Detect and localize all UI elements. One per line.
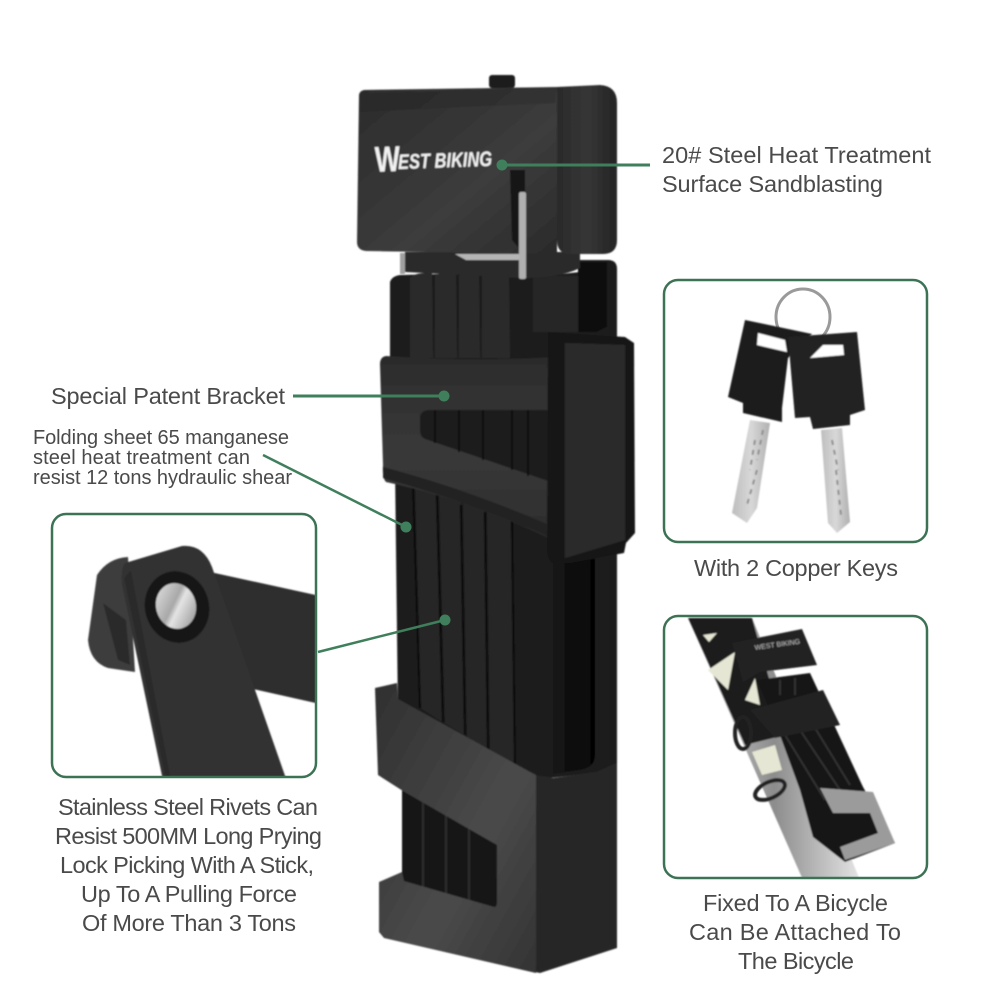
leader line: bracket	[293, 390, 450, 402]
steel shackle pin	[519, 192, 526, 279]
band window	[420, 410, 548, 481]
key ring	[776, 289, 830, 345]
text: special patent bracket: Special Patent Bracket	[51, 383, 285, 409]
text: stainless steel rivets: Resist 500MM Long Prying	[55, 823, 322, 849]
bicycle tube	[688, 618, 860, 880]
text: steel heat treatment: 20# Steel Heat Treatment	[662, 142, 931, 168]
lower holder	[375, 683, 617, 973]
text: fixed to a bicycle: The Bicycle	[738, 948, 854, 974]
main product: folding lock	[357, 75, 635, 973]
lock head	[734, 628, 818, 672]
lower recessed body	[533, 480, 617, 778]
text: folding sheet	[33, 427, 292, 489]
upper folded plates	[390, 262, 607, 360]
text: steel heat treatment: Surface Sandblasting	[662, 171, 883, 197]
hinge under head	[405, 252, 580, 278]
top button	[489, 75, 515, 88]
text: fixed to a bicycle: Can Be Attached To	[689, 919, 901, 945]
text: fixed to a bicycle: Fixed To A Bicycle	[703, 890, 888, 916]
text: stainless steel rivets: Stainless Steel Rivets Can	[58, 794, 318, 820]
text: stainless steel rivets	[55, 794, 322, 936]
text: stainless steel rivets: Up To A Pulling Force	[81, 881, 297, 907]
text: stainless steel rivets: Of More Than 3 Tons	[82, 910, 296, 936]
key one	[728, 320, 812, 523]
text: copper keys: With 2 Copper Keys	[694, 555, 898, 581]
text: steel heat treatment	[662, 142, 931, 197]
leader line: rivet panel	[318, 614, 450, 652]
front arm	[121, 546, 290, 790]
leader line: steel head	[496, 160, 650, 170]
rear fold wedge	[88, 557, 135, 672]
folded plates in lower window	[402, 785, 497, 908]
panel: lock fixed to bicycle	[664, 616, 927, 880]
lock head	[357, 85, 617, 279]
text: stainless steel rivets: Lock Picking With A Stick,	[60, 852, 314, 878]
panel: steel rivet detail	[52, 514, 320, 790]
logo	[374, 135, 493, 180]
rivet	[144, 571, 210, 643]
key two	[788, 332, 865, 533]
panel: two keys	[664, 280, 927, 542]
text: folding sheet: Folding sheet 65 manganese	[33, 427, 289, 449]
logo: EST BIKING	[398, 148, 492, 174]
rear arm	[210, 572, 320, 704]
folded steel plates	[395, 465, 553, 795]
panel: lock fixed to bicycle: WEST BIKING	[754, 639, 801, 652]
logo: W	[374, 138, 401, 180]
grey holder	[820, 788, 895, 860]
rear frame of lock	[525, 260, 617, 360]
text: fixed to a bicycle	[689, 890, 901, 974]
strap	[768, 689, 841, 738]
text: folding sheet: steel heat treatment can	[33, 447, 250, 469]
text: folding sheet: resist 12 tons hydraulic shear	[33, 467, 292, 489]
key slot	[510, 170, 525, 255]
patent bracket band	[380, 356, 558, 550]
lock body	[757, 673, 895, 862]
side clip of bracket	[547, 332, 635, 563]
leader line: folding sheet	[263, 455, 412, 532]
